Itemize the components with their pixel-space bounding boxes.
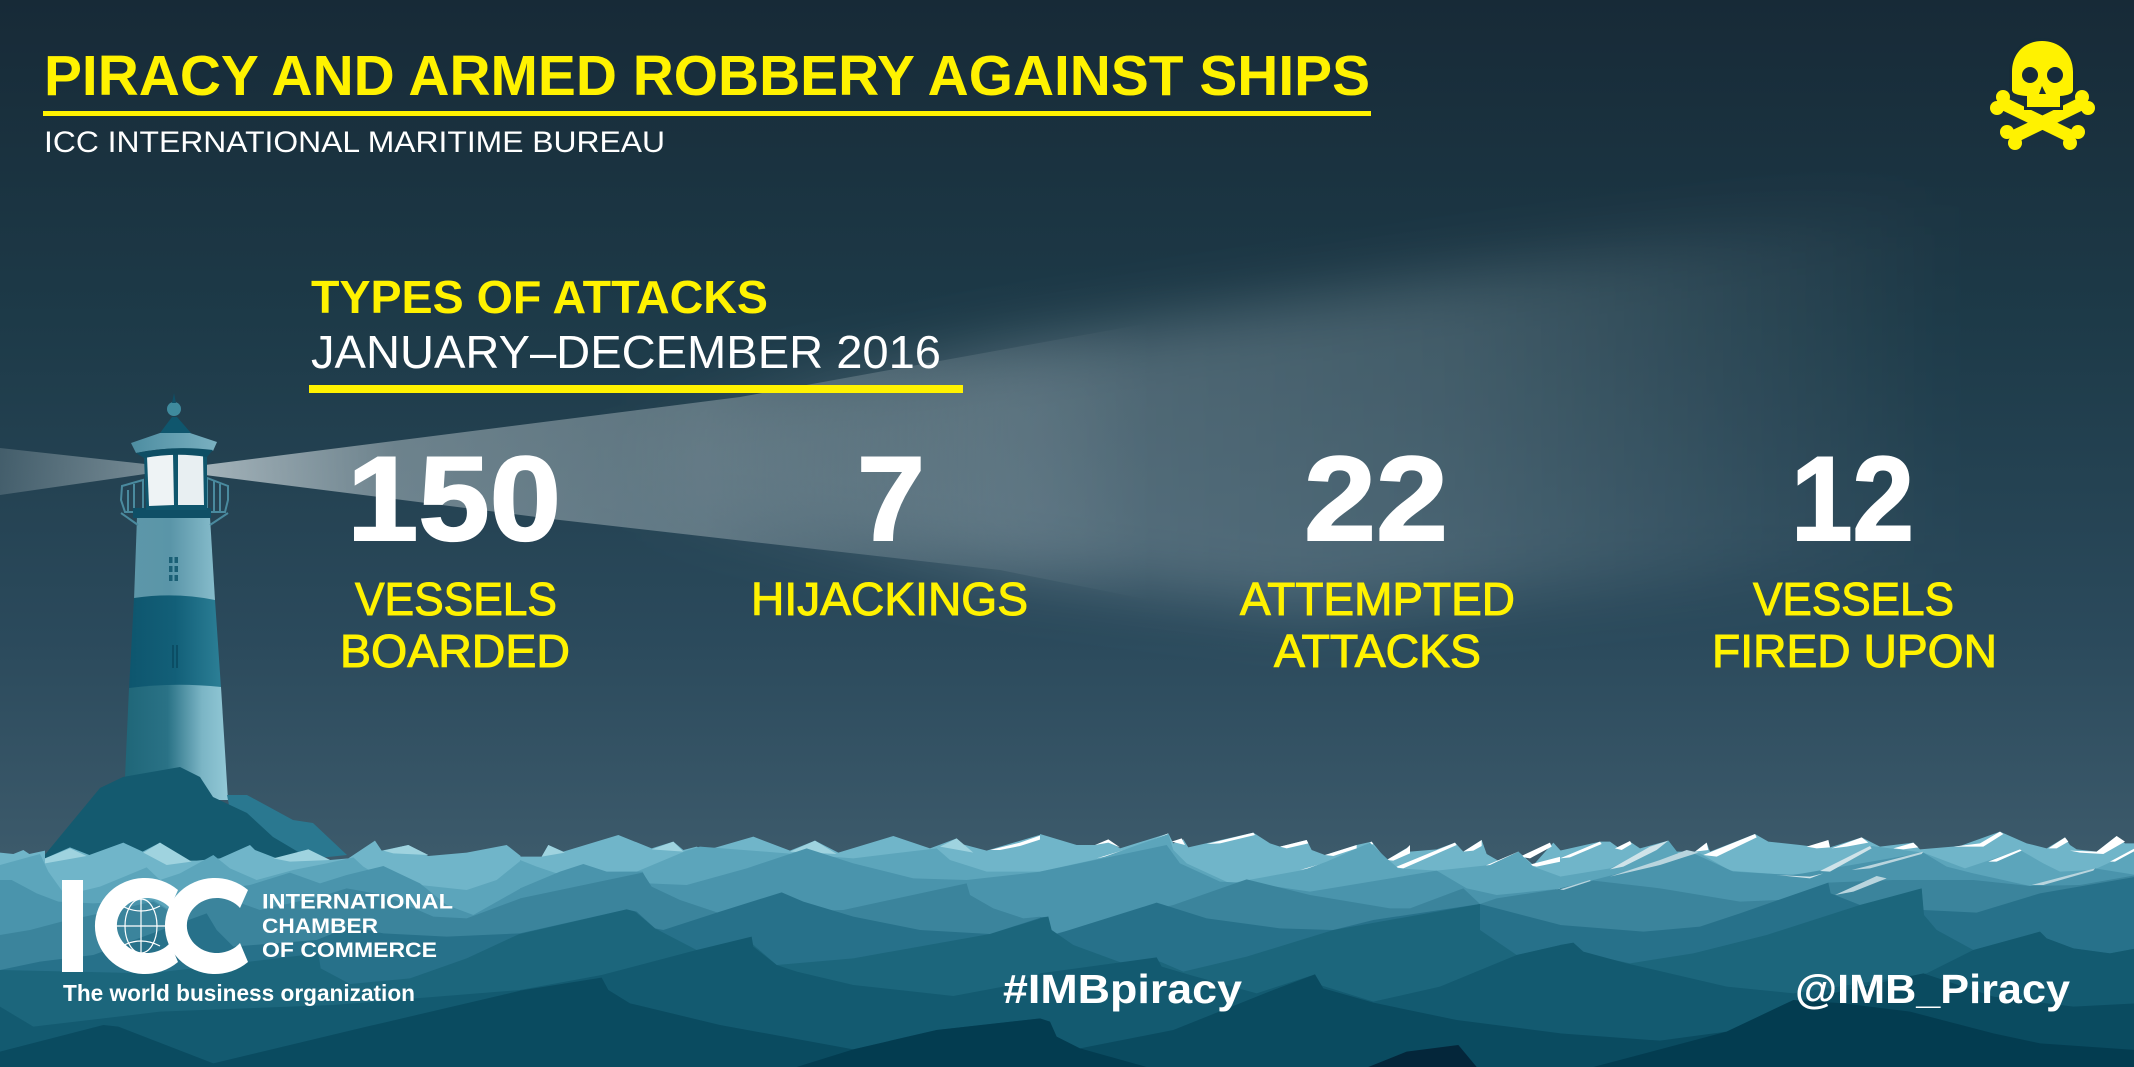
illustration: lighthouse [43,393,347,880]
stat: 150 vessels boarded [340,432,570,677]
logo tagline: The world business organization [63,980,415,1006]
stat: 22 attempted attacks: ATTEMPTED [1240,573,1515,625]
stat: 22 attempted attacks [1240,432,1515,677]
logo wordmark: OF COMMERCE [262,938,437,962]
stat: 7 hijackings: 7 [857,432,925,566]
logo mark ICC with globe [62,878,248,974]
lighthouse tower [124,517,228,800]
dark foreground rock [1368,1045,1477,1067]
subtitle: ICC INTERNATIONAL MARITIME BUREAU [44,126,665,159]
rock [43,767,300,880]
section heading: types of attacks: TYPES OF ATTACKS [311,271,768,323]
section heading: types of attacks [309,271,963,393]
stat: 22 attempted attacks: ATTACKS [1274,625,1481,677]
stat: 150 vessels boarded: BOARDED [340,625,570,677]
stat: 12 vessels fired upon: VESSELS [1753,573,1954,625]
lighthouse light beams [0,200,1950,610]
stat: 12 vessels fired upon: 12 [1791,432,1914,566]
stat: 12 vessels fired upon: FIRED UPON [1712,625,1997,677]
lantern room and gallery [121,393,228,525]
title: PIRACY AND ARMED ROBBERY AGAINST SHIPS [44,44,1370,108]
logo wordmark: CHAMBER [262,914,378,938]
waves: right section [1560,832,2134,1067]
illustration: sea waves [0,832,2134,1067]
icon: skull and crossbones [1990,41,2095,150]
foam streaks [1560,832,2134,862]
waves: centre-right section [1040,833,1561,1067]
stat: 12 vessels fired upon [1712,432,1997,677]
logo: international chamber of commerce [62,878,453,1006]
stat: 22 attempted attacks: 22 [1304,432,1448,566]
logo wordmark [262,890,453,962]
section heading: types of attacks: JANUARY–DECEMBER 2016 [311,326,941,378]
stat: 7 hijackings [751,432,1028,625]
stat: 7 hijackings: HIJACKINGS [751,573,1028,625]
stat: 150 vessels boarded: VESSELS [355,573,557,625]
logo wordmark: INTERNATIONAL [262,890,453,914]
stat: 150 vessels boarded: 150 [347,432,561,566]
waves: left section [0,841,521,1067]
waves: centre-left section [520,835,1041,1067]
rock behind [227,795,347,860]
hashtag: #IMBpiracy [1003,966,1242,1012]
twitter handle: @IMB_Piracy [1795,966,2070,1012]
